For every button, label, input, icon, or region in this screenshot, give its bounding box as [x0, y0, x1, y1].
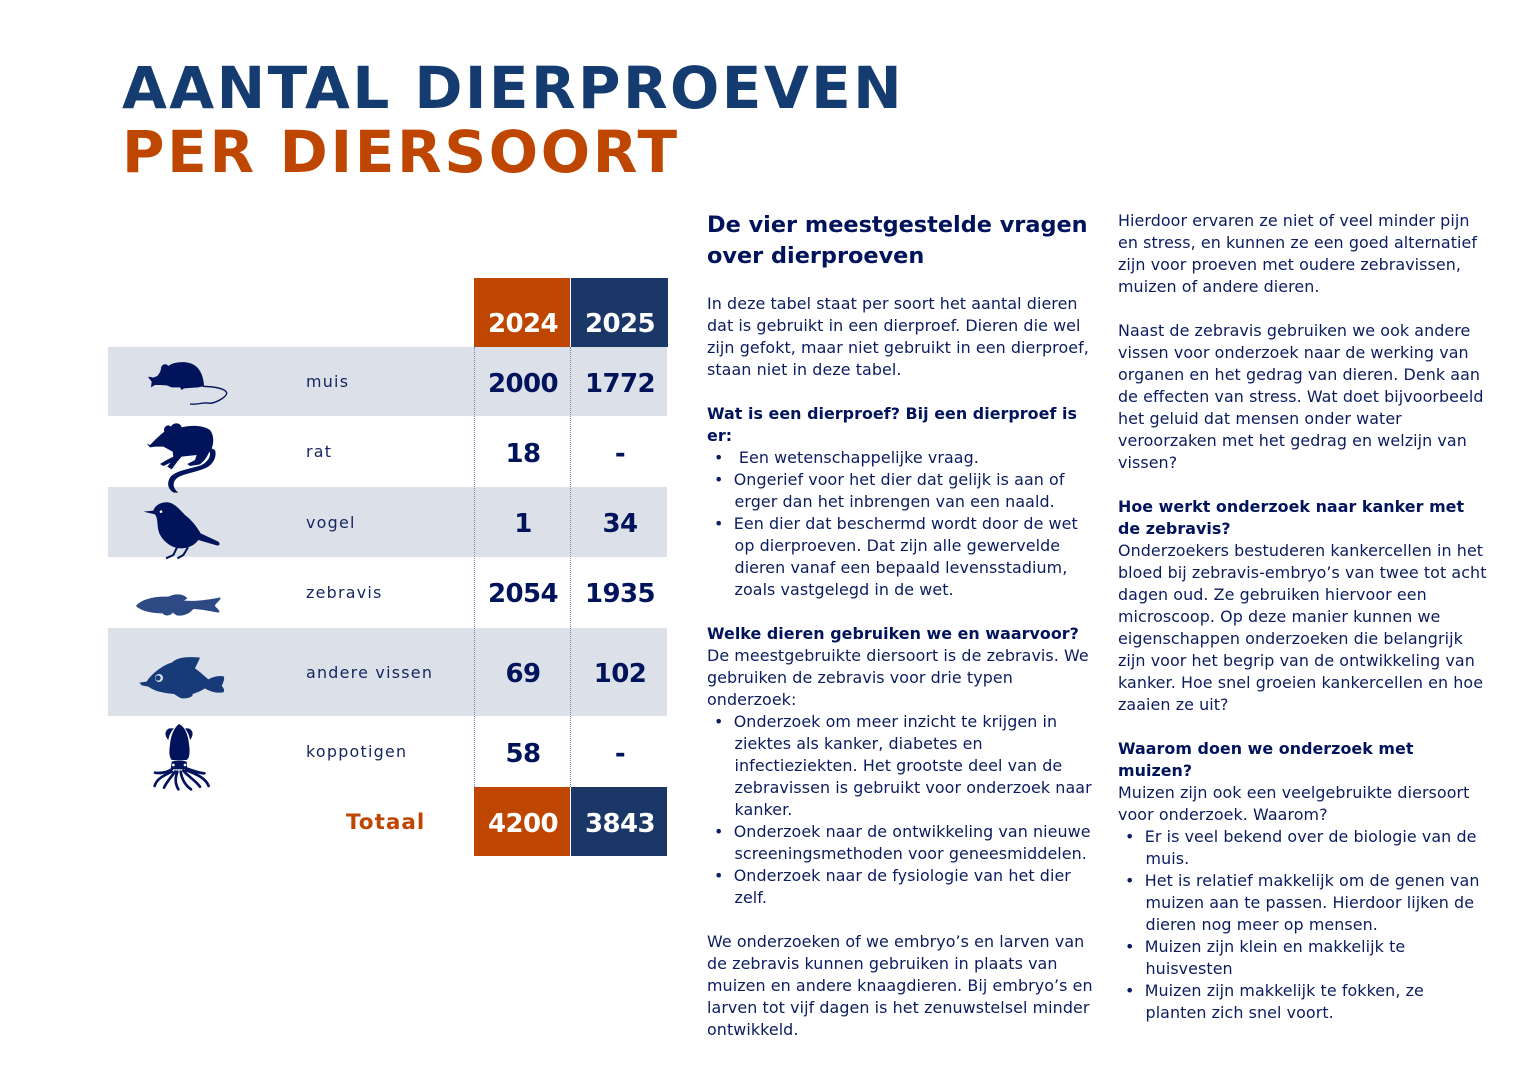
icon: squid [155, 724, 209, 789]
column separator 2025 [570, 347, 571, 787]
species label: zebravis: zebravis [306, 583, 383, 602]
year 2024: 2024 [488, 309, 558, 339]
value koppotigen 2024: 58 [506, 739, 540, 769]
title: PER DIERSOORT [122, 118, 680, 186]
paragraph: zebravis: De meestgebruikte diersoort is de zebravis. We gebruiken de zebravis voor drie typen onderzoek: [707, 646, 1089, 709]
column 1 text [707, 212, 1093, 1039]
subheading: wat is een dierproef: Wat is een dierproef? Bij een dierproef is er: [707, 404, 1077, 445]
paragraph: muizen: Muizen zijn ook een veelgebruikte diersoort voor onderzoek. Waarom? [1118, 783, 1469, 824]
icon: mouse [148, 362, 227, 404]
row band: vogel [108, 487, 667, 557]
value andere vissen 2024: 69 [506, 659, 540, 689]
bullet list 3: • Er is veel bekend over de biologie van de muis. • Het is relatief makkelijk om de genen van muizen aan te passen. Hierdoor lijken de dieren nog meer op mensen. • Muizen zijn klein en makkelijk te huisvesten • Muizen zijn makkelijk te fokken, ze planten zich snel voort. [1125, 827, 1479, 1022]
value rat 2025: - [615, 439, 625, 469]
paragraph: kanker: Onderzoekers bestuderen kankercellen in het bloed bij zebravis-embryo’s van twee tot acht dagen oud. Ze gebruiken hiervoor een microscoop. Op deze manier kunnen we eigenschappen onderzoeken die belangrijk zijn voor het begrip van de ontwikkeling van kanker. Hoe snel groeien kankercellen en hoe zaaien ze uit? [1118, 541, 1487, 714]
subheading: kanker: Hoe werkt onderzoek naar kanker met de zebravis? [1118, 497, 1464, 538]
value zebravis 2024: 2054 [488, 579, 558, 609]
bullet list 2: • Onderzoek om meer inzicht te krijgen in ziektes als kanker, diabetes en infectieziekten. Het grootste deel van de zebravissen is gebruikt voor onderzoek naar kanker. • Onderzoek naar de ontwikkeling van nieuwe screeningsmethoden voor geneesmiddelen. • Onderzoek naar de fysiologie van het dier zelf. [714, 712, 1092, 907]
species label: muis: muis [306, 372, 349, 391]
value andere vissen 2025: 102 [594, 659, 646, 689]
value muis 2024: 2000 [488, 369, 558, 399]
value koppotigen 2025: - [615, 739, 625, 769]
icon: bird [143, 502, 220, 558]
total cell 2025 [571, 787, 667, 856]
total 2025: 3843 [585, 809, 655, 839]
bullet list 1: • Een wetenschappelijke vraag. • Ongerief voor het dier dat gelijk is aan of erger dan het inbrengen van een naald. • Een dier dat beschermd wordt door de wet op dierproeven. Dat zijn alle gewervelde dieren vanaf een bepaald levensstadium, zoals vastgelegd in de wet. [714, 448, 1078, 599]
species label: vogel: vogel [306, 513, 356, 532]
column 2 text [1118, 211, 1487, 1022]
title [122, 54, 904, 186]
value muis 2025: 1772 [585, 369, 655, 399]
subheading: muizen: Waarom doen we onderzoek met muizen? [1118, 739, 1413, 780]
paragraph: hierdoor: Hierdoor ervaren ze niet of veel minder pijn en stress, en kunnen ze een goed alternatief zijn voor proeven met oudere zebravissen, muizen of andere dieren. [1118, 211, 1477, 296]
species label: andere vissen: andere vissen [306, 663, 433, 682]
column separator 2024 [474, 347, 475, 787]
row band: andere vissen [108, 628, 667, 716]
paragraph: embryo's: We onderzoeken of we embryo’s en larven van de zebravis kunnen gebruiken in plaats van muizen en andere knaagdieren. Bij embryo’s en larven tot vijf dagen is het zenuwstelsel minder ontwikkeld. [707, 932, 1093, 1039]
intro paragraph: In deze tabel staat per soort het aantal dieren dat is gebruikt in een dierproef. Dieren die wel zijn gefokt, maar niet gebruikt in een dierproef, staan niet in deze tabel. [707, 294, 1089, 379]
column header 2024 [474, 278, 570, 347]
species label: koppotigen: koppotigen [306, 742, 407, 761]
icon: rat [147, 423, 216, 493]
heading: De vier meestgestelde vragen over dierproeven [707, 212, 1088, 269]
value zebravis 2025: 1935 [585, 579, 655, 609]
subheading: welke dieren: Welke dieren gebruiken we en waarvoor? [707, 624, 1079, 643]
value vogel 2024: 1 [514, 509, 532, 539]
total label: Totaal [346, 810, 425, 835]
table panel [108, 278, 668, 856]
total cell 2024 [474, 787, 570, 856]
species label: rat: rat [306, 442, 332, 461]
title: AANTAL DIERPROEVEN [122, 54, 904, 122]
value rat 2024: 18 [506, 439, 540, 469]
year 2025: 2025 [585, 309, 655, 339]
icon: zebrafish [136, 594, 221, 616]
value vogel 2025: 34 [602, 509, 637, 539]
column header 2025 [571, 278, 668, 347]
total 2024: 4200 [488, 809, 558, 839]
icon: other fish [139, 657, 224, 698]
row band: muis [108, 347, 667, 416]
paragraph: andere vissen: Naast de zebravis gebruiken we ook andere vissen voor onderzoek naar de werking van organen en het gedrag van dieren. Denk aan de effecten van stress. Wat doet bijvoorbeeld het geluid dat mensen onder water veroorzaken met het gedrag en welzijn van vissen? [1118, 321, 1484, 472]
